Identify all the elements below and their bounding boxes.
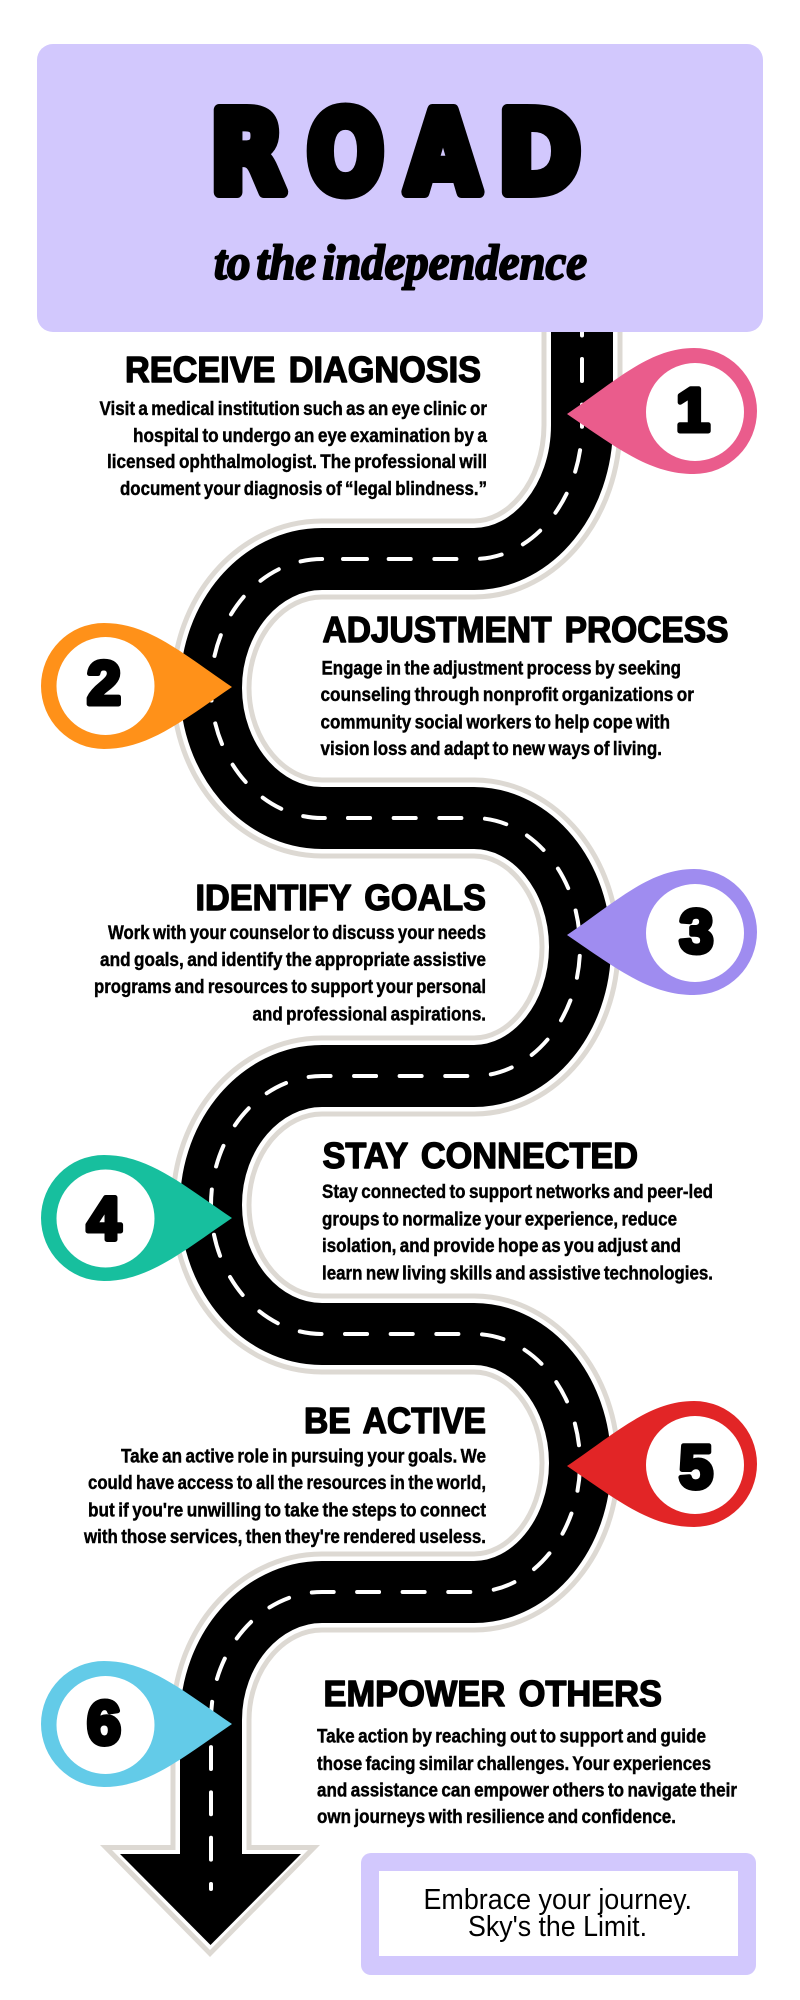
step 3 text: and goals, and identify the appropriate assistive	[100, 949, 486, 971]
step 4 text: isolation, and provide hope as you adjust and	[322, 1235, 681, 1257]
step 6 text: EMPOWER OTHERS	[324, 1673, 662, 1714]
step 6 text: own journeys with resilience and confidence.	[317, 1806, 676, 1828]
step 5 text	[83, 1400, 486, 1548]
title panel	[37, 44, 763, 332]
step 3 text: Work with your counselor to discuss your needs	[108, 922, 486, 944]
step 6 text: those facing similar challenges. Your experiences	[317, 1753, 711, 1775]
step 2 text: vision loss and adapt to new ways of living.	[320, 738, 662, 760]
step 2 text: Engage in the adjustment process by seeking	[322, 658, 681, 680]
title: ROAD: R	[210, 89, 285, 219]
title: ROAD: A	[406, 89, 480, 219]
step 5 text: but if you're unwilling to take the steps to connect	[88, 1500, 486, 1522]
step 6 text	[317, 1673, 737, 1828]
step 2 text	[320, 609, 728, 760]
marker 3	[567, 869, 757, 995]
step 2 text: community social workers to help cope with	[320, 712, 670, 734]
marker 2	[41, 623, 232, 749]
closing callout box	[361, 1853, 756, 1975]
marker 5	[567, 1401, 757, 1527]
step 1 text: RECEIVE DIAGNOSIS	[125, 349, 481, 390]
step 4 text	[322, 1135, 713, 1284]
step 3 text: IDENTIFY GOALS	[196, 877, 486, 918]
marker 6	[41, 1661, 232, 1787]
marker 1	[567, 348, 757, 474]
marker 5: 5	[679, 1433, 713, 1501]
winding road with arrowhead	[100, 300, 582, 1957]
closing callout box: Embrace your journey.	[424, 1884, 692, 1916]
marker 2: 2	[87, 649, 121, 717]
step 5 text: Take an active role in pursuing your goals. We	[121, 1446, 486, 1468]
subtitle: to the independence	[214, 234, 587, 290]
step 2 text: counseling through nonprofit organizations or	[320, 684, 694, 706]
marker 6: 6	[87, 1689, 121, 1757]
title: ROAD: O	[307, 89, 384, 219]
step 5 text: with those services, then they're rendered useless.	[83, 1526, 486, 1548]
closing callout box: Sky's the Limit.	[468, 1911, 647, 1943]
marker 1: 1	[676, 376, 710, 444]
step 2 text: ADJUSTMENT PROCESS	[322, 609, 728, 650]
step 4 text: Stay connected to support networks and peer-led	[322, 1181, 713, 1203]
step 1 text: Visit a medical institution such as an eye clinic or	[100, 398, 487, 420]
step 4 text: groups to normalize your experience, reduce	[322, 1208, 677, 1230]
step 4 text: learn new living skills and assistive technologies.	[322, 1262, 713, 1284]
step 1 text: hospital to undergo an eye examination by a	[133, 425, 487, 447]
step 6 text: and assistance can empower others to navigate their	[317, 1780, 737, 1802]
title: ROAD: D	[498, 89, 581, 219]
step 4 text: STAY CONNECTED	[322, 1135, 638, 1176]
marker 4: 4	[87, 1184, 121, 1252]
step 3 text	[94, 877, 486, 1026]
step 6 text: Take action by reaching out to support and guide	[317, 1726, 706, 1748]
step 1 text: licensed ophthalmologist. The professional will	[107, 451, 487, 473]
marker 4	[41, 1155, 232, 1281]
marker 3: 3	[680, 898, 713, 966]
step 3 text: programs and resources to support your personal	[94, 976, 486, 998]
step 5 text: BE ACTIVE	[304, 1400, 486, 1441]
step 3 text: and professional aspirations.	[252, 1004, 486, 1026]
step 1 text: document your diagnosis of “legal blindness.”	[120, 478, 487, 500]
step 1 text	[100, 349, 487, 500]
step 5 text: could have access to all the resources in the world,	[88, 1472, 486, 1494]
title: ROAD	[210, 89, 581, 219]
